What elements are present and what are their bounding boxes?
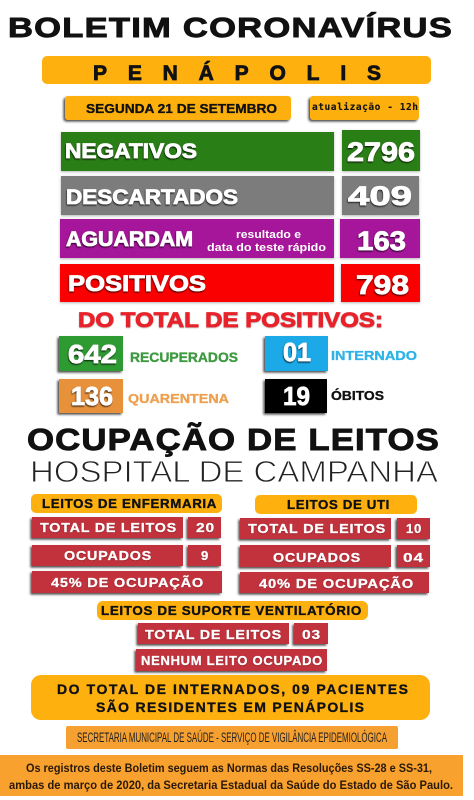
- callout: residentes: DO TOTAL DE INTERNADOS, 09 PACIENTES: [57, 681, 408, 697]
- header: uti: LEITOS DE UTI: [287, 498, 390, 512]
- row: total de leitos uti: [240, 518, 430, 539]
- stat: obitos: 19: [283, 381, 310, 411]
- stat: recuperados: 642: [68, 339, 117, 369]
- row: nenhum leito ocupado: NENHUM LEITO OCUPADO: [141, 654, 323, 668]
- stat: recuperados: RECUPERADOS: [130, 350, 238, 365]
- panel: descartados: 409: [348, 181, 412, 211]
- stat: quarentena: [59, 379, 230, 413]
- header: enfermaria: [31, 494, 222, 513]
- title: BOLETIM CORONAVÍRUS: [8, 12, 453, 43]
- stat: obitos: [265, 379, 384, 413]
- banner: city name: PENÁPOLIS: [93, 62, 381, 85]
- row: total de leitos suporte: TOTAL DE LEITOS: [145, 627, 282, 642]
- panel: descartados: [61, 176, 419, 215]
- panel: positivos: [60, 264, 420, 302]
- panel: positivos: POSITIVOS: [68, 271, 206, 296]
- header: suporte ventilatorio: LEITOS DE SUPORTE VENTILATÓRIO: [101, 603, 362, 618]
- heading: hospital de campanha: HOSPITAL DE CAMPANHA: [30, 454, 438, 489]
- row: nenhum leito ocupado: [136, 649, 327, 671]
- panel: leitos de suporte ventilatorio: [97, 601, 368, 671]
- header: suporte ventilatorio: [97, 601, 368, 620]
- panel: aguardam: 163: [357, 226, 406, 256]
- row: percentual uti: [240, 572, 429, 593]
- stat: recuperados: [59, 336, 238, 371]
- header: uti: [255, 495, 417, 514]
- row: percentual: [32, 571, 222, 593]
- row: total de leitos: TOTAL DE LEITOS: [40, 520, 177, 535]
- stat: internado: 01: [283, 337, 311, 367]
- update time label: atualização - 12h: [312, 102, 418, 113]
- panel: leitos de uti: [240, 495, 430, 593]
- heading: ocupacao de leitos: OCUPAÇÃO DE LEITOS: [27, 422, 440, 457]
- row: ocupados: OCUPADOS: [64, 548, 152, 563]
- stat: internado: [265, 336, 417, 371]
- stat: quarentena: 136: [71, 381, 113, 411]
- panel: aguardam: [60, 219, 420, 258]
- panel: aguardam: resultado e: [236, 229, 301, 241]
- row: total de leitos uti: 10: [406, 521, 422, 536]
- footer note: ambas de março de 2020, da Secretaria Estadual da Saúde do Estado de São Paulo.: [9, 778, 453, 792]
- panel: leitos de enfermaria: [31, 494, 222, 593]
- panel: negativos: 2796: [347, 137, 415, 167]
- banner: city name: [42, 56, 431, 85]
- row: ocupados: 9: [201, 548, 209, 563]
- stat: internado: INTERNADO: [331, 348, 417, 363]
- row: total de leitos uti: TOTAL DE LEITOS: [248, 521, 386, 536]
- row: total de leitos: [32, 517, 221, 538]
- row: ocupados: [32, 545, 221, 566]
- panel: aguardam: AGUARDAM: [66, 228, 193, 251]
- panel: negativos: [61, 130, 420, 171]
- callout: residentes: SÃO RESIDENTES EM PENÁPOLIS: [96, 698, 364, 715]
- date label: [65, 96, 291, 120]
- row: total de leitos suporte: [138, 623, 328, 644]
- stat: quarentena: QUARENTENA: [128, 391, 230, 406]
- stat: obitos: ÓBITOS: [331, 388, 384, 403]
- footer note: Os registros deste Boletim seguem as Normas das Resoluções SS-28 e SS-31,: [26, 761, 432, 775]
- date label: SEGUNDA 21 DE SETEMBRO: [86, 101, 277, 116]
- row: percentual: 45% DE OCUPAÇÃO: [51, 575, 204, 590]
- row: percentual uti: 40% DE OCUPAÇÃO: [259, 576, 414, 591]
- panel: descartados: DESCARTADOS: [66, 186, 238, 209]
- row: ocupados uti: 04: [403, 550, 424, 565]
- row: ocupados uti: [240, 545, 430, 567]
- row: total de leitos suporte: 03: [302, 627, 321, 642]
- panel: negativos: NEGATIVOS: [65, 140, 197, 163]
- callout: residentes: [31, 675, 430, 720]
- panel: positivos: 798: [356, 270, 409, 300]
- heading: do total de positivos: DO TOTAL DE POSITIVOS:: [78, 309, 383, 332]
- panel: aguardam: data do teste rápido: [207, 242, 326, 254]
- row: total de leitos: 20: [196, 520, 215, 535]
- update time label: [310, 96, 419, 120]
- label: secretaria: [66, 726, 398, 749]
- row: ocupados uti: OCUPADOS: [273, 550, 361, 565]
- header: enfermaria: LEITOS DE ENFERMARIA: [42, 497, 217, 511]
- footer note: [0, 755, 463, 796]
